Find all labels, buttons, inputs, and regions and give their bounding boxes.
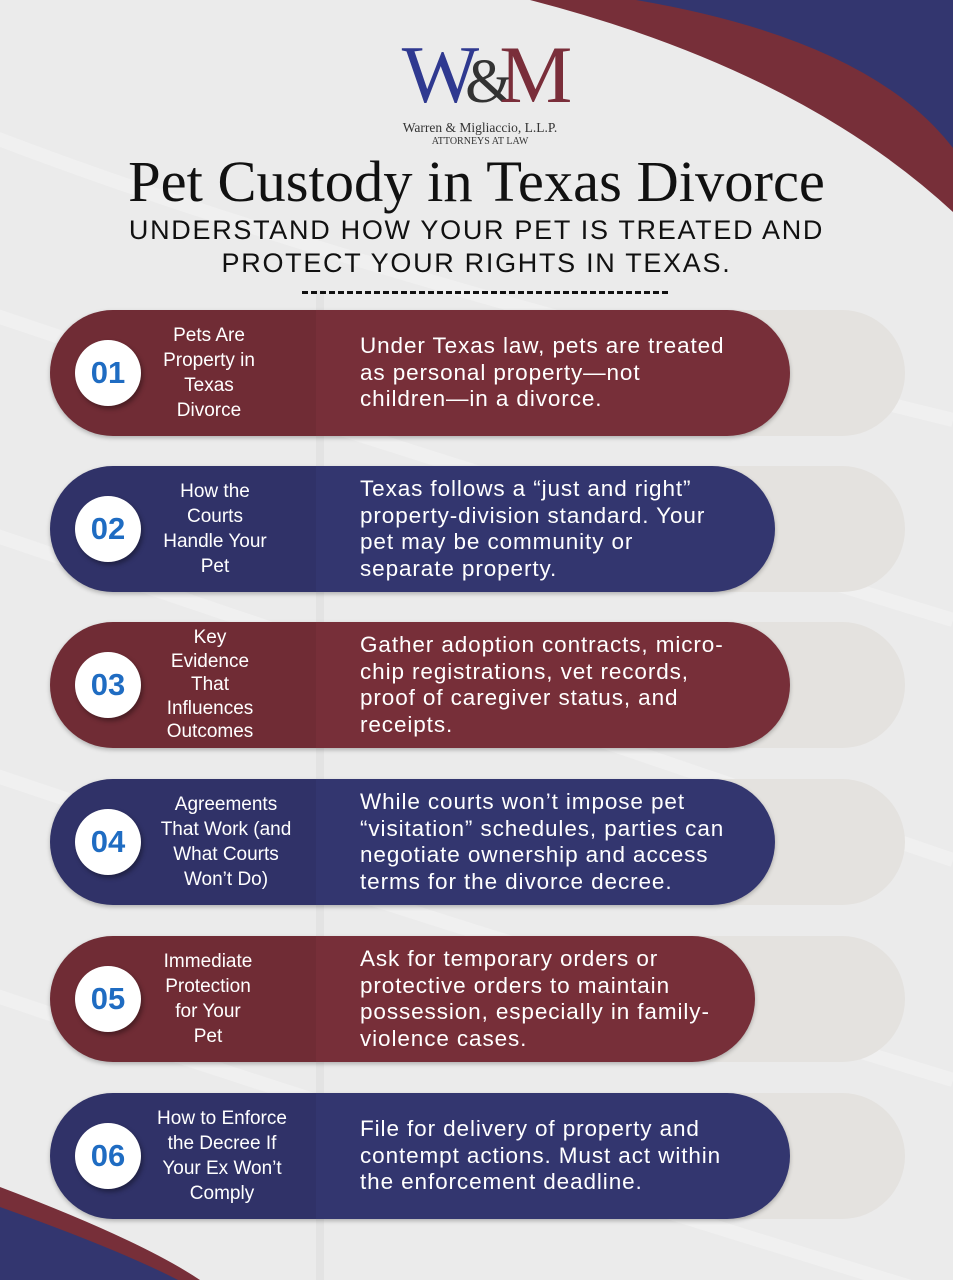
row 06: the Decree If xyxy=(168,1133,276,1154)
row 05: Pet xyxy=(194,1026,222,1047)
row 05: Ask for temporary orders or xyxy=(360,946,658,971)
subtitle xyxy=(129,215,824,278)
row 03: Gather adoption contracts, micro- xyxy=(360,632,724,657)
row 05: violence cases. xyxy=(360,1026,527,1050)
row 02: Pet xyxy=(201,556,229,577)
row 05: Immediate xyxy=(164,951,252,972)
row 02: Handle Your xyxy=(163,531,267,552)
row 03: 03 xyxy=(91,667,125,702)
decoration: bottom left corner xyxy=(0,1187,200,1280)
row 05: protective orders to maintain xyxy=(360,972,670,998)
row 05: possession, especially in family- xyxy=(360,999,710,1024)
row 03: proof of caregiver status, and xyxy=(360,685,678,710)
subtitle: PROTECT YOUR RIGHTS IN TEXAS. xyxy=(222,248,731,278)
row 06: Your Ex Won’t xyxy=(162,1158,282,1179)
row 02: Texas follows a “just and right” xyxy=(360,476,691,501)
row 02: property-division standard. Your xyxy=(360,502,705,528)
row 04: “visitation” schedules, parties can xyxy=(360,816,724,840)
row 06: the enforcement deadline. xyxy=(360,1169,643,1194)
logo: ATTORNEYS AT LAW xyxy=(432,136,528,147)
row 02: Courts xyxy=(187,506,243,527)
row 04: 04 xyxy=(91,824,125,859)
row 03: receipts. xyxy=(360,712,453,736)
logo: W&M xyxy=(402,29,558,120)
row 05: for Your xyxy=(175,1001,241,1022)
decoration: top right corner xyxy=(530,0,953,212)
row 04: Agreements xyxy=(175,794,277,815)
row 06 xyxy=(48,1092,905,1224)
row 05: 05 xyxy=(91,981,125,1016)
row 01: Under Texas law, pets are treated xyxy=(360,333,724,358)
row 04: terms for the divorce decree. xyxy=(360,868,672,894)
row 05: Protection xyxy=(165,976,251,997)
row 01: Pets Are xyxy=(173,325,245,346)
row 03: Outcomes xyxy=(167,721,253,742)
row 02: pet may be community or xyxy=(360,529,633,554)
row 03 xyxy=(48,622,905,752)
row 04: That Work (and xyxy=(161,819,291,840)
row 04: negotiate ownership and access xyxy=(360,842,708,867)
row 04: What Courts xyxy=(173,844,279,865)
row 05 xyxy=(48,936,905,1066)
row 03: Evidence xyxy=(171,651,249,672)
row 03: chip registrations, vet records, xyxy=(360,658,689,684)
row 01 xyxy=(48,310,905,440)
row 01: children—in a divorce. xyxy=(360,386,602,411)
row 02: 02 xyxy=(91,511,125,546)
row 02: separate property. xyxy=(360,556,557,580)
row 04: While courts won’t impose pet xyxy=(360,789,685,814)
row 04: Won’t Do) xyxy=(184,869,268,890)
row 01: as personal property—not xyxy=(360,360,640,385)
row 06: 06 xyxy=(91,1138,125,1173)
row 02 xyxy=(48,466,905,596)
row 06: How to Enforce xyxy=(157,1108,287,1129)
row 04 xyxy=(48,778,905,910)
row 06: File for delivery of property and xyxy=(360,1116,700,1141)
row 03: Influences xyxy=(167,698,253,719)
row 01: Divorce xyxy=(177,400,241,421)
subtitle: UNDERSTAND HOW YOUR PET IS TREATED AND xyxy=(129,215,824,245)
row 06: contempt actions. Must act within xyxy=(360,1143,721,1168)
row 01: Property in xyxy=(163,350,255,371)
title: Pet Custody in Texas Divorce xyxy=(128,149,825,214)
row 01: 01 xyxy=(91,355,125,390)
row 03: That xyxy=(191,674,229,695)
logo: Warren & Migliaccio, L.L.P. xyxy=(403,120,557,135)
row 02: How the xyxy=(180,481,250,502)
row 06: Comply xyxy=(190,1183,254,1204)
row 03: Key xyxy=(194,627,226,648)
row 01: Texas xyxy=(184,375,234,396)
